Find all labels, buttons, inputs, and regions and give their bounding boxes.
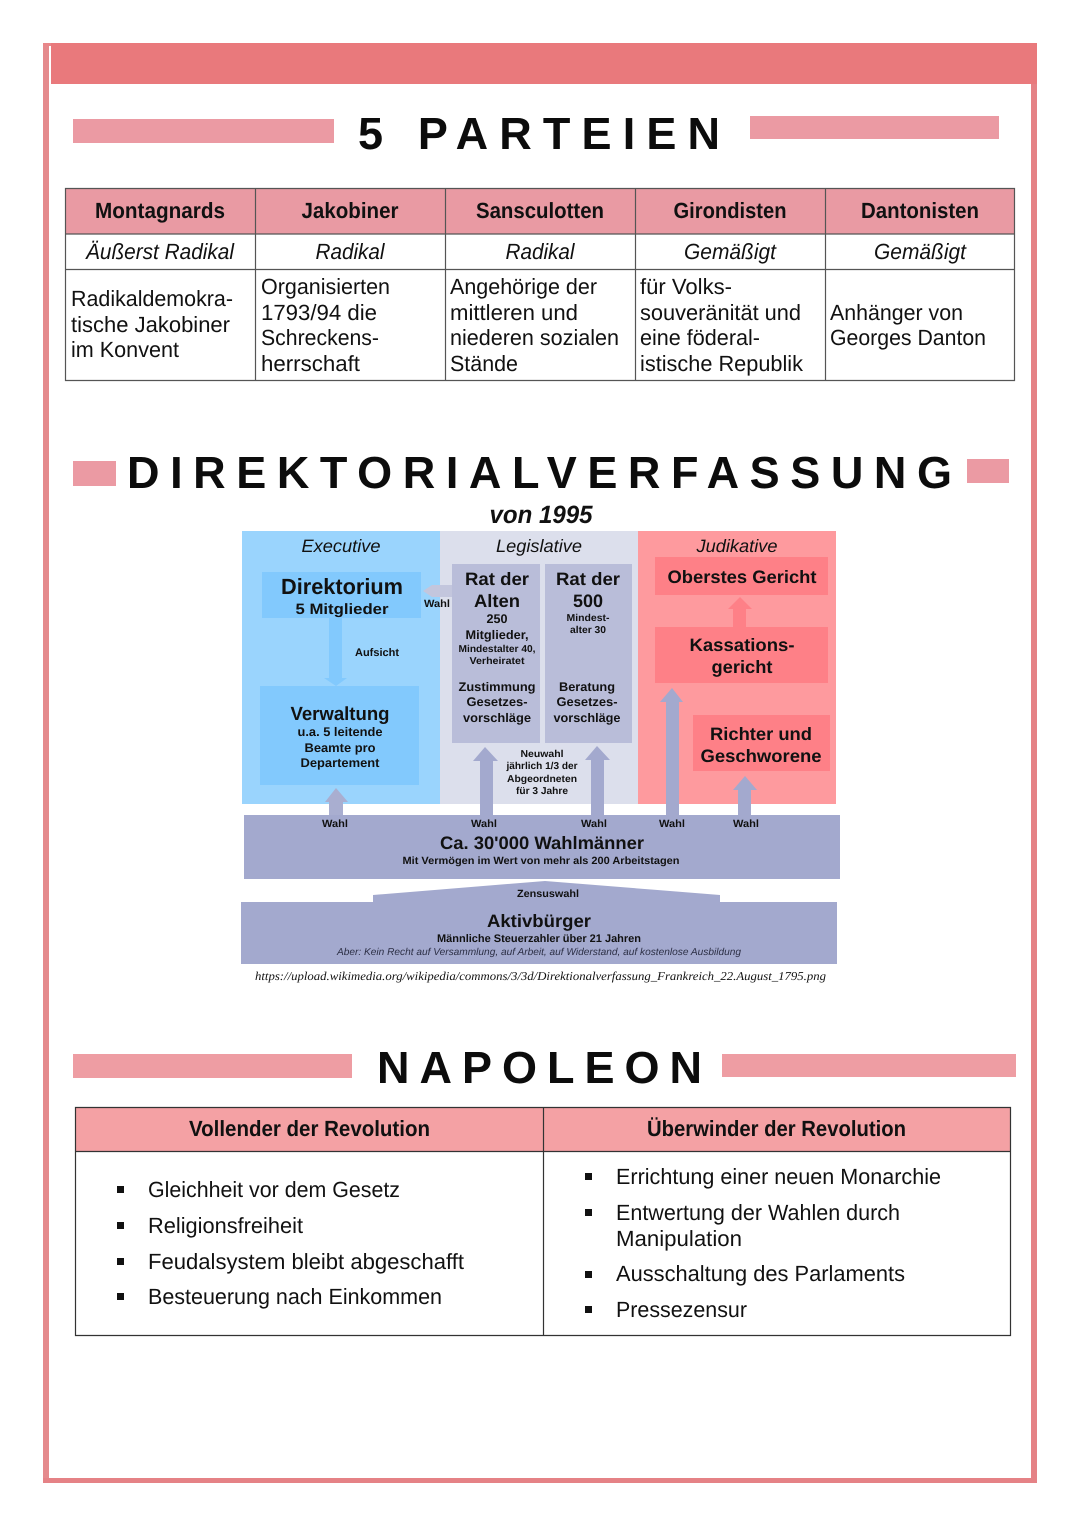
column: Montagnards: Radikaldemokra- [71,286,233,311]
panel: Legislative [423,531,638,804]
heading: Direktorialverfassung: DIREKTORIALVERFASSUNG [127,447,952,498]
panel: Legislative: 250 [486,612,508,626]
panel: Wahlmänner: Ca. 30'000 Wahlmänner [440,833,644,853]
column: Vollender der Revolution: Religionsfreiheit [148,1213,303,1238]
column: Girondisten [640,198,804,376]
arrows: election upward [325,688,757,816]
column: Jakobiner: Jakobiner [302,198,399,223]
heading: 5 Parteien [73,108,999,159]
panel: Legislative: Neuwahl [520,749,564,760]
column: Dantonisten: Gemäßigt [874,239,967,264]
panel: Aktivbürger [241,881,837,964]
panel: Judikative: Geschworene [700,746,822,766]
panel: Legislative: Gesetzes- [466,695,528,709]
column: Sansculotten: Radikal [506,239,576,264]
panel: Judikative: Oberstes Gericht [668,567,816,587]
column: Montagnards [71,198,235,362]
column: Jakobiner: Organisierten [261,274,390,299]
column: Dantonisten [830,198,986,350]
column: Jakobiner: herrschaft [261,351,360,376]
panel: Legislative: jährlich 1/3 der [505,761,578,772]
column: Dantonisten: Dantonisten [861,198,979,223]
column: Überwinder der Revolution [585,1116,941,1322]
column: Girondisten: Gemäßigt [684,239,777,264]
column: Vollender der Revolution: Vollender der Revolution [189,1116,430,1141]
panel: Legislative: Zustimmung [458,680,536,694]
column: Sansculotten: Sansculotten [476,198,604,223]
column: Vollender der Revolution [117,1116,464,1309]
column: Sansculotten: Angehörige der [450,274,597,299]
column: Überwinder der Revolution: Ausschaltung des Parlaments [616,1261,905,1286]
column: Girondisten: istische Republik [640,351,804,376]
panel: Judikative: gericht [712,657,773,677]
panel: Judikative: Richter und [710,724,812,744]
panel: Legislative: Legislative [496,536,582,556]
panel: Legislative: Mindest- [566,613,610,624]
panel: Executive: u.a. 5 leitende [298,725,383,739]
panel: Wahlmänner: Wahl [581,818,607,830]
panel: Executive: Verwaltung [290,704,390,725]
panel: Aktivbürger: Männliche Steuerzahler über 21 Jahren [437,933,641,945]
column: Girondisten: souveränität und [640,300,801,325]
panel: Legislative: vorschläge [554,711,621,725]
panel: Legislative: für 3 Jahre [516,786,568,797]
panel: Legislative: Mitglieder, [466,628,528,642]
panel: Legislative: Wahl [424,598,450,610]
column: Jakobiner [261,198,399,376]
panel: Wahlmänner: Mit Vermögen im Wert von mehr als 200 Arbeitstagen [402,855,680,867]
panel: Executive [242,531,440,804]
diagram: constitution of 1795 [241,531,840,964]
source link: https://upload.wikimedia.org/wikipedia/commons/3/3d/Direktionalverfassung_Frankreich_22.August_1795.png [255,969,826,983]
panel: Executive: Executive [302,536,380,556]
panel: Legislative: Verheiratet [470,656,525,667]
column: Dantonisten: Georges Danton [830,325,986,350]
column: Montagnards: im Konvent [71,337,179,362]
panel: Legislative: Abgeordneten [507,774,577,785]
column: Montagnards: Montagnards [95,198,225,223]
column: Vollender der Revolution: Feudalsystem bleibt abgeschafft [148,1249,464,1274]
column: Montagnards: tische Jakobiner [71,312,230,337]
column: Sansculotten: mittleren und [450,300,578,325]
column: Jakobiner: Radikal [316,239,386,264]
panel: Wahlmänner: Wahl [322,818,348,830]
column: Girondisten: eine föderal- [640,325,760,350]
column: Sansculotten: niederen sozialen [450,325,619,350]
heading: Napoleon: NAPOLEON [377,1042,702,1093]
column: Girondisten: Girondisten [674,198,786,223]
table: Napoleon [75,1107,1011,1336]
panel: Wahlmänner [244,815,840,879]
panel: Executive: Direktorium [281,574,403,599]
panel: Aktivbürger: Aktivbürger [487,911,591,931]
column: Sansculotten: Stände [450,351,518,376]
panel: Aktivbürger: Zensuswahl [517,888,579,900]
column: Girondisten: für Volks- [640,274,732,299]
column: Sansculotten [450,198,619,376]
panel: Wahlmänner: Wahl [471,818,497,830]
panel: Legislative: Gesetzes- [556,695,618,709]
column: Vollender der Revolution: Besteuerung nach Einkommen [148,1284,442,1309]
panel: Executive: 5 Mitglieder [296,601,389,618]
column: Jakobiner: 1793/94 die [261,300,377,325]
column: Überwinder der Revolution: Entwertung der Wahlen durch [616,1200,900,1225]
column: Überwinder der Revolution: Pressezensur [616,1297,747,1322]
top header band [51,43,1037,84]
column: Überwinder der Revolution: Überwinder der Revolution [647,1116,906,1141]
column: Dantonisten: Anhänger von [830,300,963,325]
panel: Legislative: Alten [474,591,520,611]
panel: Legislative: vorschläge [463,711,531,725]
panel: Executive: Beamte pro [304,741,376,755]
panel: Legislative: Rat der [465,569,529,589]
panel: Wahlmänner: Wahl [659,818,685,830]
panel: Legislative: 500 [573,591,603,611]
column: Überwinder der Revolution: Manipulation [616,1226,742,1251]
column: Montagnards: Äußerst Radikal [85,239,235,264]
subheading: von 1995: von 1995 [490,501,594,529]
panel: Judikative [638,531,836,804]
heading: Napoleon [73,1042,1016,1093]
panel: Legislative: Rat der [556,569,620,589]
panel: Legislative: Mindestalter 40, [458,644,536,655]
table: five parties [65,188,1015,380]
panel: Executive: Departement [300,756,380,770]
column: Vollender der Revolution: Gleichheit vor dem Gesetz [148,1177,400,1202]
panel: Judikative: Judikative [695,536,778,556]
panel: Executive: Aufsicht [355,647,399,659]
column: Überwinder der Revolution: Errichtung einer neuen Monarchie [616,1164,941,1189]
panel: Judikative: Kassations- [690,635,794,655]
panel: Wahlmänner: Wahl [733,818,759,830]
panel: Legislative: alter 30 [570,625,606,636]
column: Jakobiner: Schreckens- [261,325,379,350]
panel: Aktivbürger: Aber: Kein Recht auf Versammlung, auf Arbeit, auf Widerstand, auf kostenlose Ausbildung [336,947,741,958]
panel: Legislative: Beratung [559,680,615,694]
heading: 5 Parteien: 5 PARTEIEN [358,108,720,159]
